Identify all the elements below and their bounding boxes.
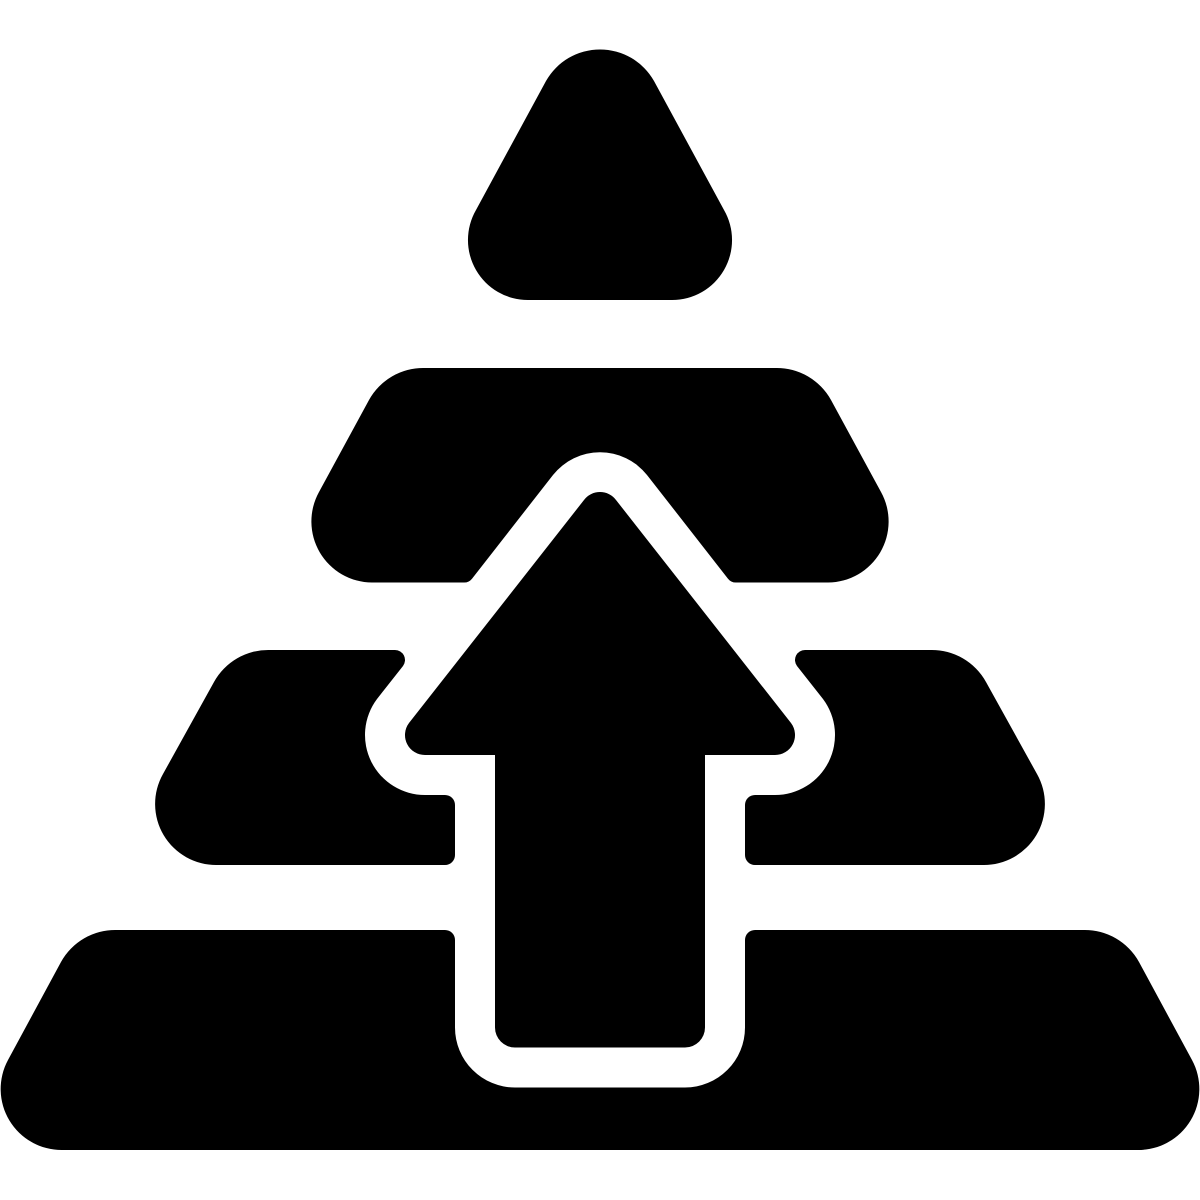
pyramid tier: third left <box>155 650 455 865</box>
pyramid tier: base <box>1 930 1199 1150</box>
pyramid tier: second <box>311 368 889 583</box>
up arrow <box>405 492 795 1048</box>
pyramid tier: top <box>468 49 732 300</box>
pyramid tier: third right <box>745 650 1045 865</box>
